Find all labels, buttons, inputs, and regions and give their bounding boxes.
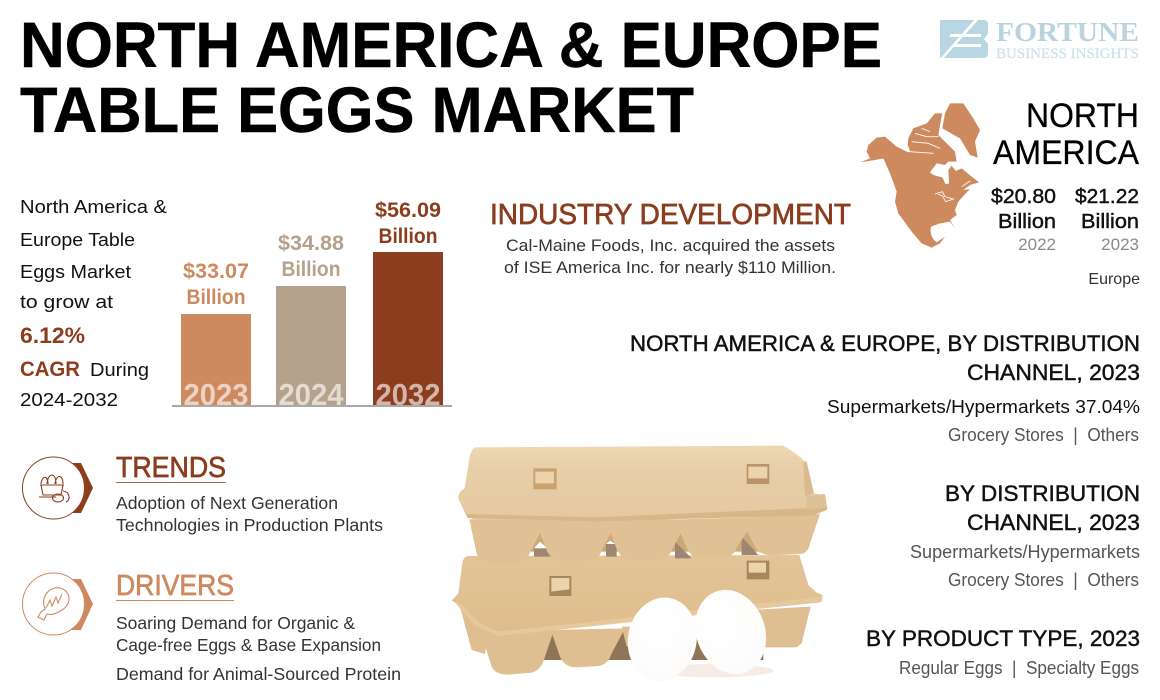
heading: North America: NORTH xyxy=(1026,97,1139,135)
logo: Fortune Business Insights: FORTUNE xyxy=(996,17,1139,47)
title: NORTH AMERICA & EUROPE xyxy=(20,9,882,81)
stat: 2022 value: $20.80 xyxy=(991,185,1056,208)
bar: 2024: 2024 xyxy=(278,377,344,412)
bar: 2032: Billion xyxy=(378,225,438,248)
section: by product type: Regular Eggs | Specialty Eggs xyxy=(899,658,1139,678)
label: Europe: Europe xyxy=(1088,271,1140,288)
bar: 2032 xyxy=(373,199,443,412)
logo: Fortune Business Insights: BUSINESS INSIGHTS xyxy=(996,46,1139,62)
stat: 2022 value: Billion xyxy=(998,210,1056,233)
industry development: Cal-Maine Foods, Inc. acquired the assets xyxy=(506,236,835,255)
bar: 2023 xyxy=(181,260,251,412)
bottom carton cups xyxy=(460,607,811,675)
section: distribution channel North America and Europe: CHANNEL, 2023 xyxy=(967,360,1140,385)
trends text: Technologies in Production Plants xyxy=(116,515,383,535)
icon: drivers protein xyxy=(22,573,93,635)
industry development: INDUSTRY DEVELOPMENT xyxy=(490,199,851,231)
title: TABLE EGGS MARKET xyxy=(20,74,694,146)
growth text block xyxy=(20,196,168,410)
eggs xyxy=(621,580,778,687)
bar chart xyxy=(172,199,452,412)
carton tabs xyxy=(533,464,769,596)
heading: North America xyxy=(993,97,1139,172)
top carton backing xyxy=(530,523,760,558)
section: distribution channel North America and Europe: Supermarkets/Hypermarkets 37.04% xyxy=(827,397,1140,417)
map: North America xyxy=(860,103,980,248)
drivers text: Cage-free Eggs & Base Expansion xyxy=(116,635,381,655)
stat: 2022 value: 2022 xyxy=(1018,235,1056,254)
stat: 2023 value xyxy=(1075,185,1139,254)
bar: 2032: $56.09 xyxy=(375,199,441,222)
bottom carton lid xyxy=(452,555,823,633)
growth text block: to grow at xyxy=(20,291,113,312)
section: by product type xyxy=(866,626,1140,678)
drivers heading: DRIVERS xyxy=(116,570,234,602)
section: distribution channel North America and Europe: NORTH AMERICA & EUROPE, BY DISTRIBUTION xyxy=(630,331,1140,356)
section: by distribution channel: Grocery Stores | Others xyxy=(948,570,1139,590)
icon: trends egg basket xyxy=(22,457,93,519)
stat: 2023 value: 2023 xyxy=(1101,235,1139,254)
section: by distribution channel: CHANNEL, 2023 xyxy=(967,510,1140,535)
stat: 2022 value xyxy=(991,185,1056,254)
bar: 2024: Billion xyxy=(282,258,340,281)
drivers text xyxy=(116,613,401,684)
industry development xyxy=(490,199,851,277)
trends heading: TRENDS xyxy=(116,452,226,484)
trends text: Adoption of Next Generation xyxy=(116,493,338,513)
section: distribution channel North America and Europe: Grocery Stores | Others xyxy=(948,425,1139,445)
section: by distribution channel: BY DISTRIBUTION xyxy=(945,481,1140,506)
growth text block: CAGR xyxy=(20,358,80,381)
illustration: egg cartons and eggs xyxy=(452,446,827,687)
bar: 2023: 2023 xyxy=(184,377,248,412)
stat: 2023 value: Billion xyxy=(1081,210,1139,233)
top carton lid xyxy=(458,446,827,520)
bar: 2032: 2032 xyxy=(376,377,440,412)
section: by distribution channel: Supermarkets/Hypermarkets xyxy=(910,542,1140,562)
top carton cups xyxy=(469,514,820,563)
title xyxy=(20,9,882,146)
drivers text: Demand for Animal-Sourced Protein xyxy=(116,664,401,684)
bar: 2023: $33.07 xyxy=(183,260,249,283)
growth text block: North America & xyxy=(20,196,168,217)
logo: Fortune Business Insights xyxy=(939,17,1139,62)
growth text block: During xyxy=(90,359,149,380)
section: distribution channel North America and Europe xyxy=(630,331,1140,445)
industry development: of ISE America Inc. for nearly $110 Million. xyxy=(504,258,836,277)
heading: North America: AMERICA xyxy=(993,134,1139,172)
section: by product type: BY PRODUCT TYPE, 2023 xyxy=(866,626,1140,651)
growth text block: Europe Table xyxy=(20,229,135,250)
bar: 2024: $34.88 xyxy=(278,232,344,255)
stat: 2023 value: $21.22 xyxy=(1075,185,1139,208)
bar: 2024 xyxy=(276,232,346,412)
growth text block: 6.12% xyxy=(20,323,85,348)
growth text block: Eggs Market xyxy=(20,261,131,282)
section: by distribution channel xyxy=(910,481,1140,590)
drivers text: Soaring Demand for Organic & xyxy=(116,613,355,633)
bar: 2023: Billion xyxy=(186,286,246,309)
growth text block: 2024-2032 xyxy=(20,389,118,410)
trends text xyxy=(116,493,383,535)
